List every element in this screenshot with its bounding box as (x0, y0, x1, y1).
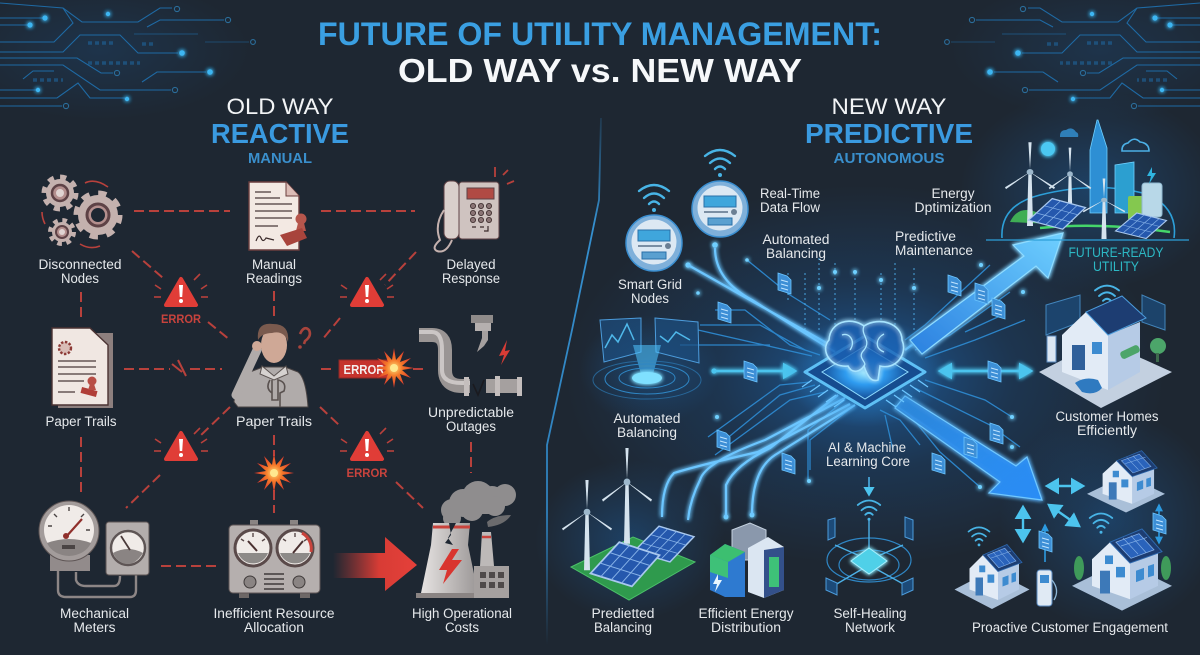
label: disconnected nodes: Nodes (61, 271, 99, 286)
icon: mechanical meters (39, 501, 149, 597)
label: manual readings: Manual (252, 257, 296, 272)
error tag with explosion (339, 348, 414, 388)
label: predictive maintenance: Maintenance (895, 243, 973, 258)
label: automated balancing: Balancing (617, 425, 677, 440)
label: high operational costs (412, 606, 512, 635)
heading: new way: NEW WAY (832, 94, 947, 119)
icon: power plant with smoke (416, 481, 516, 598)
icon: house lower right (1072, 514, 1172, 611)
label: mechanical meters (60, 606, 129, 635)
label: predicted balancing: Predietted (592, 606, 654, 621)
warning: lower left (154, 428, 208, 459)
icon: house upper right (1087, 451, 1165, 513)
label: energy optimization (914, 186, 992, 215)
label: delayed response (442, 257, 500, 286)
panel: old way network connectors (81, 211, 471, 566)
label: self-healing network: Self-Healing (834, 606, 906, 621)
warning: lower right (340, 428, 394, 480)
label: AI and machine learning core: Learning Core (826, 454, 910, 469)
icon: AI core chip and brain (785, 317, 945, 427)
divider (547, 118, 601, 645)
label: real-time data flow: Real-Time (760, 186, 820, 201)
label: energy optimization: Dptimization (914, 200, 992, 215)
heading: new way (805, 94, 973, 167)
label: delayed response: Delayed (446, 257, 496, 272)
label: paper trails center: Paper Trails (236, 414, 312, 429)
icon: self-healing network (826, 500, 913, 595)
label: predicted balancing (592, 606, 654, 635)
label: customer homes efficiently: Customer Homes (1056, 409, 1159, 424)
icon: house lower left with charger (954, 527, 1057, 609)
heading: old way: MANUAL (248, 150, 312, 167)
label: unpredictable outages: Outages (446, 419, 496, 434)
heading: new way: PREDICTIVE (805, 118, 973, 149)
title (318, 16, 882, 89)
label: inefficient resource allocation (214, 606, 334, 635)
warning: lower right: ERROR (346, 466, 388, 480)
label: inefficient resource allocation: Inefficient Resource (214, 606, 334, 621)
icon: smart meter 1 (626, 185, 682, 271)
label: delayed response: Response (442, 271, 500, 286)
label: future-ready utility (1068, 245, 1164, 274)
arrow: red to high costs (333, 537, 417, 591)
warning: top right (340, 274, 394, 305)
label: predictive maintenance: Predictive (895, 229, 956, 244)
label: efficient energy distribution (698, 606, 794, 635)
label: inefficient resource allocation: Allocation (244, 620, 304, 635)
label: automated balancing: Automated (614, 411, 680, 426)
label: efficient energy distribution: Efficient Energy (698, 606, 794, 621)
label: AI and machine learning core (826, 440, 910, 469)
icon: customer home (1039, 286, 1172, 408)
title: OLD WAY vs. NEW WAY (398, 52, 802, 89)
heading: old way: OLD WAY (226, 94, 334, 119)
arrow: up to future-ready utility (910, 233, 1063, 354)
label: customer homes efficiently: Efficiently (1077, 423, 1137, 438)
label: self-healing network (834, 606, 906, 635)
label: unpredictable outages: Unpredictable (428, 405, 514, 420)
label: customer homes efficiently (1056, 409, 1159, 438)
label: high operational costs: Costs (445, 620, 479, 635)
circuit traces (680, 255, 1025, 487)
icon: telephone (435, 167, 514, 252)
error tag with explosion: ERROR (344, 363, 384, 377)
heading: old way: REACTIVE (211, 118, 349, 149)
icon: automated balancing hologram dashboard (593, 318, 701, 399)
label: smart grid nodes (618, 277, 682, 306)
panel: new way data network (662, 242, 1031, 520)
label: future-ready utility: UTILITY (1093, 259, 1139, 274)
label: self-healing network: Network (845, 620, 895, 635)
label: proactive customer engagement: Proactive Customer Engagement (972, 620, 1168, 635)
circuit decoration: top left (0, 3, 255, 109)
icon: control panel gauges (229, 520, 320, 598)
label: unpredictable outages (428, 405, 514, 434)
icon: gears (42, 178, 119, 248)
label: AI and machine learning core: AI & Machine (828, 440, 906, 455)
label: efficient energy distribution: Distribution (711, 620, 781, 635)
icon: confused worker (234, 324, 310, 407)
label: automated balancing top: Balancing (766, 246, 826, 261)
icon: manual reading document (249, 182, 307, 250)
label: automated balancing top: Automated (762, 232, 830, 247)
arrows: customer connections (1023, 486, 1166, 562)
warning: top left: ERROR (161, 312, 201, 326)
label: future-ready utility: FUTURE-READY (1068, 245, 1164, 260)
label: manual readings: Readings (246, 271, 302, 286)
label: smart grid nodes: Nodes (631, 291, 669, 306)
bright beams (662, 248, 1031, 520)
label: automated balancing (614, 411, 680, 440)
label: smart grid nodes: Smart Grid (618, 277, 682, 292)
label: real-time data flow (760, 186, 820, 215)
label: mechanical meters: Mechanical (60, 606, 129, 621)
label: mechanical meters: Meters (74, 620, 116, 635)
warning: top left (154, 274, 208, 326)
circuit decoration: top right (945, 3, 1200, 109)
label: high operational costs: High Operational (412, 606, 512, 621)
label: paper trails left: Paper Trails (46, 414, 117, 429)
icon: smart meter 2 (692, 150, 748, 237)
icon: paper trails document (52, 328, 113, 408)
arrow: core to self-healing (868, 477, 870, 495)
icon: future-ready city (986, 120, 1189, 240)
icon: data documents (717, 273, 1005, 474)
label: disconnected nodes (38, 257, 122, 286)
label: automated balancing top (762, 232, 830, 261)
icon: wind and solar farm (562, 448, 695, 600)
label: real-time data flow: Data Flow (760, 200, 820, 215)
icon: energy storage batteries (710, 523, 784, 598)
explosion: center bottom (254, 453, 294, 493)
title: FUTURE OF UTILITY MANAGEMENT: (318, 16, 882, 52)
label: energy optimization: Energy (932, 186, 975, 201)
heading: new way: AUTONOMOUS (834, 150, 944, 167)
label: predictive maintenance (895, 229, 973, 258)
icon: broken pipe (419, 315, 522, 396)
arrow: down to customers (895, 396, 1042, 500)
label: disconnected nodes: Disconnected (38, 257, 122, 272)
heading: old way (211, 94, 349, 167)
label: predicted balancing: Balancing (594, 620, 652, 635)
label: manual readings (246, 257, 302, 286)
